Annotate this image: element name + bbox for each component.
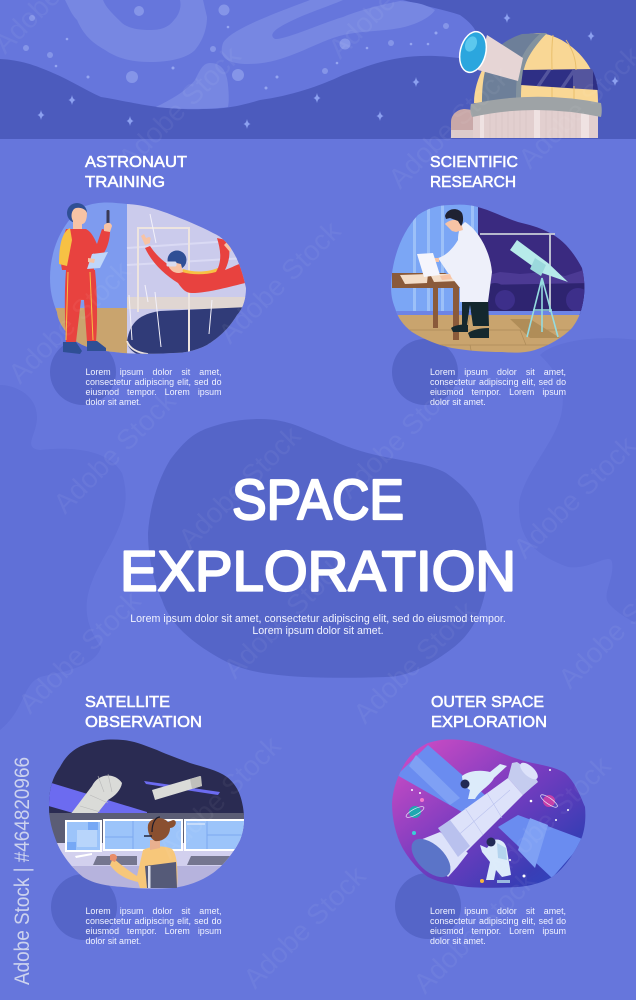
body text: consectetur adipiscing elit, sed do (86, 916, 222, 926)
heading: satellite observation (85, 694, 202, 731)
watermark overlay: Adobe Stock (47, 384, 182, 519)
body text: eiusmod tempor. Lorem ipsum (430, 387, 566, 397)
body text (430, 367, 566, 407)
top banner with observatory (0, 0, 636, 139)
body text: dolor sit amet. (430, 397, 486, 407)
watermark overlay: Adobe Stock (212, 214, 347, 349)
illustration: control room (49, 740, 244, 889)
planets (405, 793, 559, 819)
heading: astronaut training (84, 154, 187, 191)
panel: astronaut training (50, 154, 246, 407)
operator (110, 817, 177, 888)
heading: satellite observation: SATELLITE (85, 694, 170, 711)
instructor (59, 203, 112, 354)
watermark overlay: Adobe Stock (12, 584, 147, 719)
rod and telescope (480, 234, 555, 312)
heading: scientific research: RESEARCH (430, 174, 516, 191)
watermark overlay: Adobe Stock (112, 39, 247, 174)
body text: consectetur adipiscing elit, sed do (430, 377, 566, 387)
body text: Lorem ipsum dolor sit amet, (86, 906, 222, 916)
body text: consectetur adipiscing elit, sed do (86, 377, 222, 387)
panel: scientific research (391, 154, 584, 407)
stars (37, 13, 619, 129)
milky way band (0, 0, 478, 109)
watermark overlay: Adobe Stock (2, 254, 137, 389)
heading: satellite observation: OBSERVATION (85, 714, 202, 731)
body text (86, 906, 222, 946)
title (120, 468, 516, 600)
watermark overlay: Adobe Stock (332, 369, 467, 504)
astronauts (460, 764, 511, 883)
table (392, 273, 468, 340)
heading: astronaut training: TRAINING (85, 174, 165, 191)
subtitle: Lorem ipsum dolor sit amet, consectetur adipiscing elit, sed do eiusmod tempor. (130, 613, 506, 625)
watermark overlay: Adobe Stock (482, 749, 617, 884)
body text: Lorem ipsum dolor sit amet, (86, 367, 222, 377)
heading: scientific research: SCIENTIFIC (430, 154, 518, 171)
body text (430, 906, 566, 946)
panel: outer space exploration (392, 694, 586, 946)
scientist (417, 209, 492, 338)
watermark overlay: Adobe Stock (407, 864, 542, 999)
body text: dolor sit amet. (430, 936, 486, 946)
illustration: space telescope and astronauts (392, 740, 586, 888)
body text (86, 367, 222, 407)
heading: scientific research (430, 154, 518, 191)
watermark overlay: Adobe Stock (382, 59, 517, 194)
heading: astronaut training: ASTRONAUT (85, 154, 187, 171)
watermark overlay: Adobe Stock (237, 859, 372, 994)
body text: consectetur adipiscing elit, sed do (430, 916, 566, 926)
flying person (145, 238, 250, 293)
watermark overlay: Adobe Stock (217, 549, 352, 684)
subtitle (130, 613, 506, 637)
watermark overlay: Adobe Stock (152, 729, 287, 864)
subtitle: Lorem ipsum dolor sit amet. (252, 625, 384, 637)
illustration: scientist with telescope (391, 204, 584, 353)
heading: outer space exploration: EXPLORATION (431, 714, 547, 731)
illustration: wind tunnel training (50, 202, 246, 354)
heading: outer space exploration: OUTER SPACE (431, 694, 544, 711)
panel: satellite observation (49, 694, 244, 946)
title: SPACE (232, 468, 404, 532)
body text: eiusmod tempor. Lorem ipsum (86, 926, 222, 936)
body text: Lorem ipsum dolor sit amet, (430, 367, 566, 377)
heading: outer space exploration (431, 694, 547, 731)
watermark overlay: Adobe Stock (172, 419, 307, 554)
watermark overlay: Adobe Stock (347, 594, 482, 729)
space telescope (405, 760, 541, 884)
body text: dolor sit amet. (86, 936, 141, 946)
body text: dolor sit amet. (86, 397, 141, 407)
body text: eiusmod tempor. Lorem ipsum (86, 387, 222, 397)
observatory (451, 28, 602, 138)
body text: Lorem ipsum dolor sit amet, (430, 906, 566, 916)
body text: eiusmod tempor. Lorem ipsum (430, 926, 566, 936)
